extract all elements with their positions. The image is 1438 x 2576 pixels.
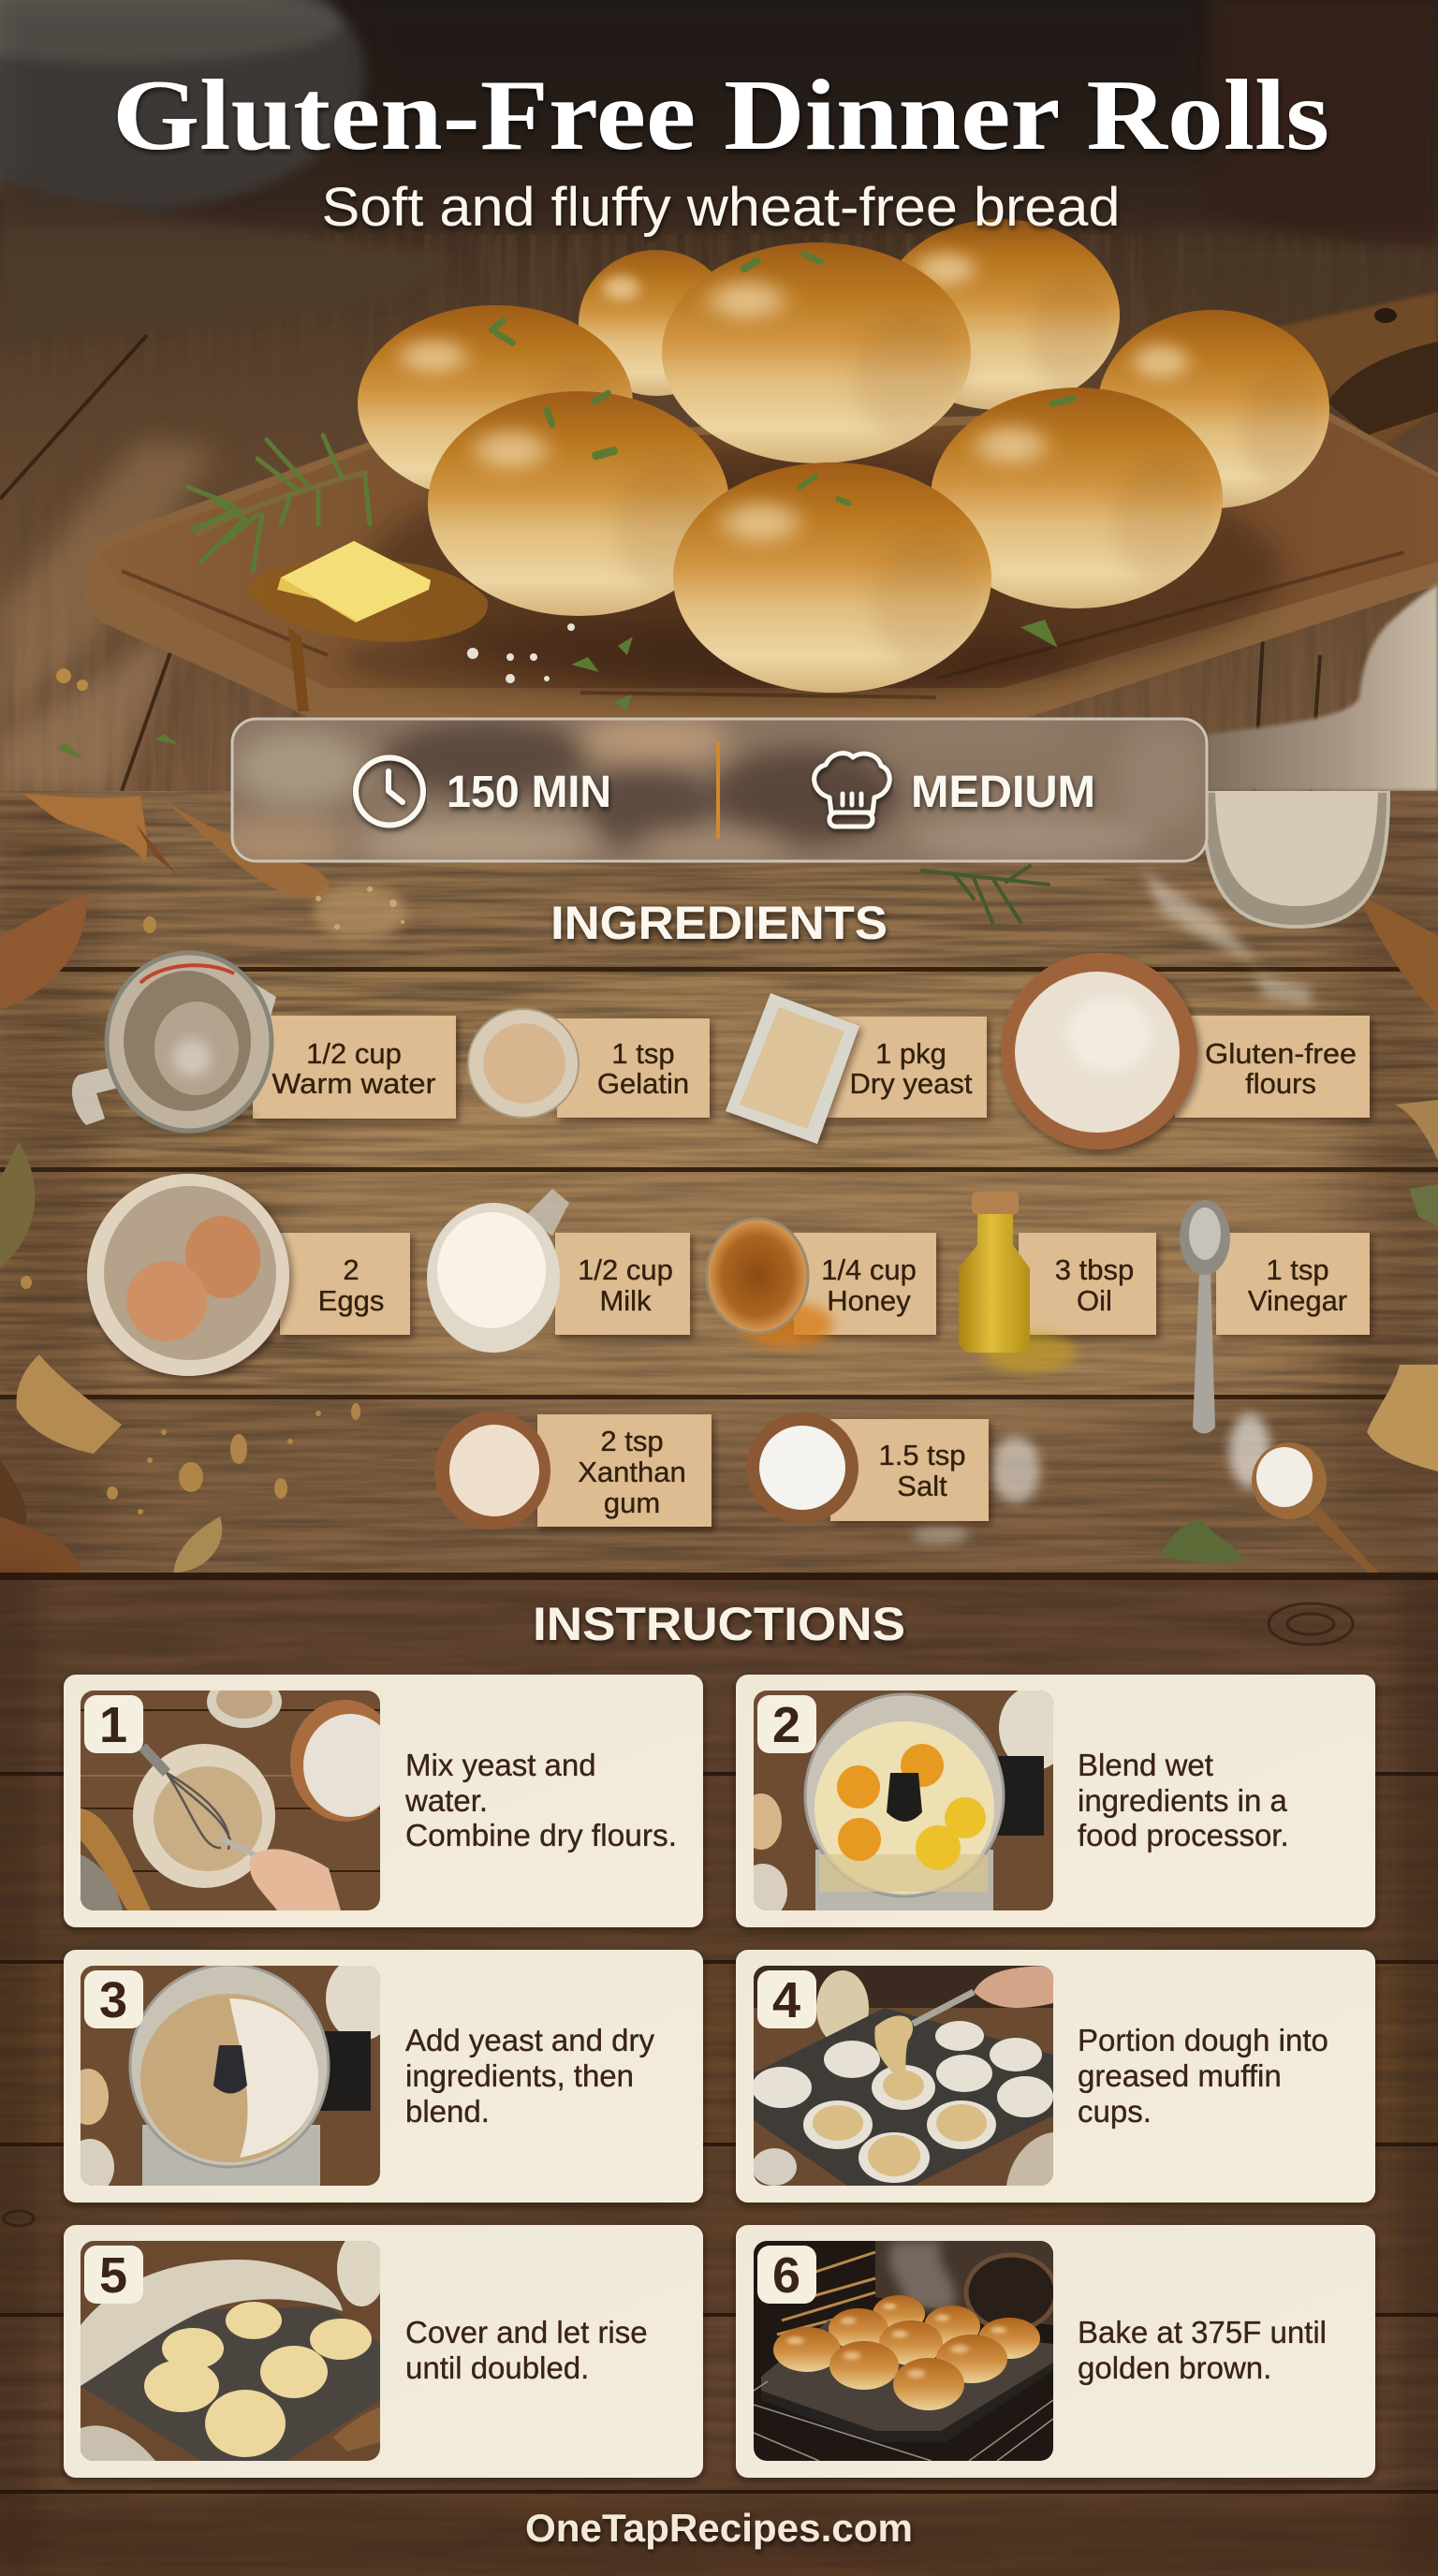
title: Gluten-Free Dinner Rolls (112, 60, 1329, 171)
step 2 text: Blend wet (1078, 1748, 1213, 1782)
crumb pile (314, 885, 407, 941)
label (253, 1016, 456, 1119)
ingredients heading: INGREDIENTS (550, 897, 888, 949)
label: Dry yeast (850, 1067, 973, 1100)
label: Gluten-free (1205, 1037, 1357, 1070)
left leaf (0, 894, 87, 1009)
step 6 text: golden brown. (1078, 2350, 1271, 2385)
paddle handle top right (1273, 292, 1438, 449)
step 5 text (405, 2315, 648, 2385)
bread piece left (17, 1354, 122, 1454)
herb flecks (487, 250, 1078, 506)
icon: packet (726, 993, 859, 1144)
crumbs and salt on board (56, 620, 1058, 760)
step 3 number badge: 3 (99, 1972, 127, 2028)
icon: eggs in bowl (87, 1174, 289, 1376)
label: Warm water (271, 1067, 436, 1100)
ingredient: dry yeast (726, 993, 987, 1144)
label: 1 tsp (1266, 1253, 1329, 1286)
icon: honey jar (707, 1219, 808, 1333)
label (557, 1018, 710, 1118)
sunlit streaks on table (0, 320, 1333, 791)
label: Vinegar (1248, 1284, 1347, 1317)
step 1 text (404, 1748, 677, 1852)
background cloth (0, 180, 423, 337)
step 6 number badge: 6 (772, 2247, 800, 2304)
time text: 150 MIN (447, 768, 611, 817)
step 5 card (64, 2225, 703, 2478)
label: 1/4 cup (821, 1253, 917, 1286)
step 1 number badge: 1 (99, 1697, 127, 1753)
step 4 photo (752, 1966, 1053, 2186)
label (1216, 1233, 1370, 1335)
shadow under rolls (365, 449, 1283, 693)
roll top centre (662, 242, 971, 463)
icon: salt bowl (746, 1412, 858, 1523)
subtitle: Soft and fluffy wheat-free bread (322, 177, 1120, 238)
label (1175, 1016, 1370, 1118)
step 2 number badge: 2 (772, 1697, 800, 1753)
glass info badge (215, 714, 1208, 869)
roll back left (579, 250, 734, 396)
honey glow (740, 1302, 833, 1347)
step 1 text: Mix yeast and (405, 1748, 596, 1782)
step 3 number badge (84, 1970, 143, 2028)
ingredient: salt (746, 1412, 989, 1523)
ingredient: vinegar (1180, 1200, 1370, 1434)
roll back right (880, 219, 1120, 410)
instructions wood background (0, 1573, 1438, 2576)
step 6 text (1078, 2315, 1327, 2385)
step 6 photo (754, 2241, 1056, 2461)
step 6 card (736, 2225, 1375, 2478)
flour jar (1203, 791, 1388, 927)
background jar (1208, 0, 1438, 245)
step 2 text: ingredients in a (1078, 1783, 1287, 1818)
roll front left (428, 391, 729, 616)
step 1 text: Combine dry flours. (405, 1818, 677, 1852)
label: gum (604, 1486, 660, 1519)
step 5 photo (81, 2232, 386, 2461)
label: 2 (343, 1253, 360, 1286)
wooden spoon with salt (1252, 1442, 1378, 1573)
label: 1 tsp (611, 1037, 675, 1070)
rosemary sprig (187, 435, 370, 571)
step 5 number badge: 5 (99, 2247, 127, 2304)
step 4 text: greased muffin (1078, 2058, 1282, 2093)
melting butter (248, 541, 488, 711)
icon: chef hat (814, 754, 889, 827)
step 6 rolls (773, 2295, 1040, 2410)
dark top vignette (0, 0, 1438, 225)
label: Oil (1077, 1284, 1112, 1317)
crumbs (21, 916, 360, 1515)
cutting board (87, 402, 1438, 723)
rosemary top (922, 866, 1049, 922)
label: 2 tsp (600, 1425, 664, 1457)
divider (716, 742, 720, 839)
step 3 text: blend. (405, 2094, 490, 2129)
step 3 photo (66, 1956, 397, 2195)
ingredient: honey (707, 1219, 936, 1347)
step 1 text: water. (404, 1783, 488, 1818)
roll front centre (673, 462, 991, 693)
step 5 text: until doubled. (405, 2350, 589, 2385)
step 1 photo (81, 1676, 399, 1910)
oil glow (983, 1332, 1077, 1373)
ingredient: xanthan gum (434, 1412, 712, 1530)
label: Xanthan (578, 1456, 686, 1488)
salt scatter (913, 1413, 1270, 1544)
label: 1/2 cup (578, 1253, 673, 1286)
roll front right (931, 388, 1223, 608)
step 2 text (1078, 1748, 1289, 1852)
flour scatter (1142, 871, 1311, 1006)
right edge herbs (1395, 1100, 1438, 1226)
step 2 text: food processor. (1078, 1818, 1289, 1852)
step 3 text: ingredients, then (405, 2058, 634, 2093)
roll left (358, 305, 633, 502)
step 2 card (736, 1675, 1375, 1927)
footer website: OneTapRecipes.com (525, 2506, 913, 2550)
label (830, 1419, 989, 1521)
step 1 number badge (84, 1695, 143, 1753)
icon: flour bowl (1001, 953, 1197, 1149)
leaves on left edge (0, 1142, 222, 1573)
icon: oil bottle (959, 1192, 1030, 1353)
hero photo: rolls on cutting board (0, 0, 1438, 791)
label: Salt (897, 1470, 947, 1502)
step 1 card (64, 1675, 703, 1927)
difficulty text: MEDIUM (911, 768, 1095, 817)
table plank lines (0, 335, 1320, 791)
icon: milk jug (427, 1189, 569, 1353)
icon: clock (356, 758, 423, 826)
icon: bowl (434, 1412, 550, 1530)
plank gaps (0, 967, 1438, 1399)
step 6 number badge (757, 2246, 816, 2304)
label: 3 tbsp (1055, 1253, 1134, 1286)
icon: measuring cup (72, 953, 276, 1135)
label: flours (1245, 1067, 1316, 1100)
step 5 text: Cover and let rise (405, 2315, 648, 2349)
label (826, 1017, 987, 1118)
linen cloth bottom right (1208, 584, 1438, 791)
top left leaf and spoon (23, 794, 329, 897)
label (280, 1233, 410, 1335)
label: 1/2 cup (306, 1037, 402, 1070)
label: Gelatin (597, 1067, 689, 1100)
right leaf (1357, 894, 1438, 1016)
label: Eggs (318, 1284, 384, 1317)
label (1019, 1233, 1156, 1335)
step 2 number badge (757, 1695, 816, 1753)
ingredient: eggs (87, 1174, 410, 1376)
step 3 card (64, 1950, 703, 2203)
step 6 text: Bake at 375F until (1078, 2315, 1327, 2349)
instructions heading: INSTRUCTIONS (533, 1598, 905, 1650)
icon: spoon (1180, 1200, 1230, 1434)
bread piece right (1367, 1365, 1438, 1471)
step 4 text: Portion dough into (1078, 2023, 1328, 2057)
roll far right (1097, 310, 1329, 508)
label: 1 pkg (875, 1037, 946, 1070)
step 4 text (1078, 2023, 1328, 2129)
step 4 number badge: 4 (772, 1972, 800, 2028)
ingredients wood background (0, 791, 1438, 1573)
step 5 number badge (84, 2246, 143, 2304)
ingredient: oil (959, 1192, 1156, 1373)
step 2 photo (739, 1686, 1070, 1920)
step 3 text (405, 2023, 654, 2129)
bay leaves bottom (1161, 1520, 1245, 1563)
background bowl (0, 0, 367, 211)
label (555, 1233, 690, 1335)
icon: bowl (468, 1009, 579, 1118)
label: Milk (599, 1284, 652, 1317)
ingredient: warm water (72, 953, 456, 1135)
ingredient: flours (1001, 953, 1370, 1149)
label: 1.5 tsp (878, 1439, 966, 1471)
label (537, 1414, 712, 1527)
ingredient: gelatin (468, 1009, 710, 1118)
label (794, 1233, 936, 1335)
step 4 card (736, 1950, 1375, 2203)
label: Honey (827, 1284, 911, 1317)
step 4 number badge (757, 1970, 816, 2028)
ingredient: milk (427, 1189, 690, 1353)
step 3 text: Add yeast and dry (405, 2023, 654, 2057)
step 4 text: cups. (1078, 2094, 1152, 2129)
